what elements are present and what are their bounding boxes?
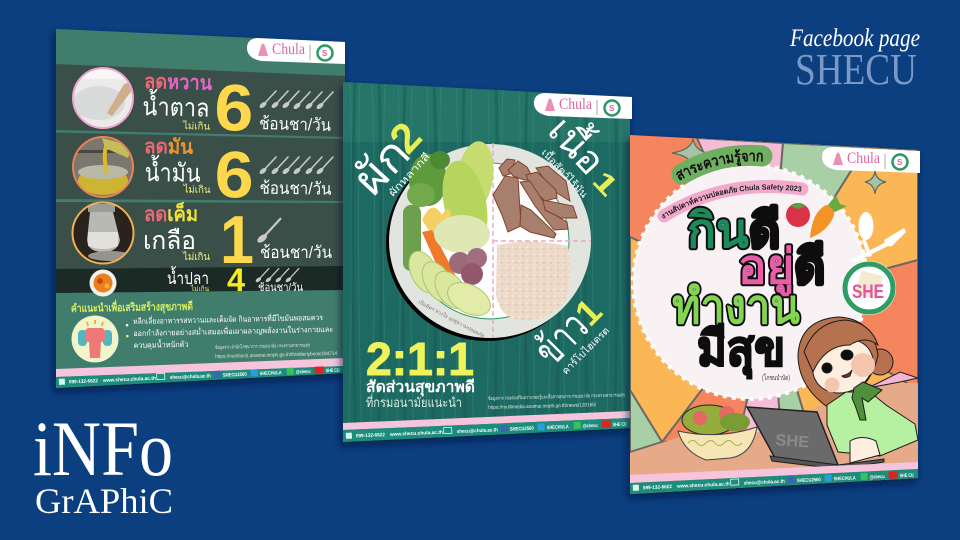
contact footer — [343, 418, 630, 442]
label: meat 1: 1 — [587, 165, 624, 202]
fish sauce row text: น้ำปลา — [167, 266, 209, 288]
meat — [493, 159, 577, 238]
source text — [488, 391, 625, 411]
pink footer strip — [56, 358, 345, 377]
dark content band — [56, 64, 345, 270]
contact footer: 099-132-6622 — [643, 484, 672, 491]
contact footer — [630, 469, 918, 494]
salt row text — [143, 201, 332, 278]
label: meat 1: เนื้อสัตว์ไร้มัน — [539, 145, 591, 201]
sugar photo — [74, 69, 132, 127]
decorative stars — [672, 139, 886, 194]
health advice bullets: ออกกำลังกายอย่างสม่ำเสมอเพื่อเผาผลาญพลังงานในร่างกายและ — [133, 324, 333, 338]
pink footer strip — [630, 462, 918, 483]
source text: https://multimedia.anamai.moph.go.th/news/120165/ — [488, 402, 597, 411]
nutrition therapy note: (โภชนบำบัด) — [762, 373, 790, 382]
salt photo ring — [72, 202, 134, 264]
heading: GRAPHIC: GrAPhiC — [35, 481, 173, 521]
oil photo ring — [73, 137, 133, 197]
panel: sodium sugar fat limits — [56, 29, 345, 388]
contact footer: SHECHULA — [834, 475, 856, 482]
source text: ข้อมูลจาก สำนักโภชนาการ กรมอนามัย กระทรวงสาธารณสุข — [215, 342, 310, 351]
contact footer: shecu@chula.ac.th — [170, 373, 211, 381]
she badge: SHE — [852, 282, 884, 303]
laptop: SHE — [775, 432, 810, 451]
row divider two — [56, 199, 345, 203]
oil spoons — [258, 157, 333, 175]
contact footer: SHE CU — [900, 473, 914, 479]
sunburst background — [630, 138, 918, 452]
salt row text: ลดเค็ม — [144, 201, 198, 226]
healthy ratio caption: ที่กรมอนามัยแนะนำ — [366, 394, 462, 410]
label: vegetables 2: ผัก — [342, 127, 420, 205]
oil row text: น้ำมัน — [145, 154, 201, 188]
salt row text: ไม่เกิน — [182, 251, 210, 263]
table — [630, 383, 918, 476]
plate — [386, 143, 591, 341]
oil row text: ไม่เกิน — [182, 184, 211, 196]
black fish sauce band — [56, 266, 345, 293]
sugar row text: ไม่เกิน — [182, 120, 210, 133]
sugar row text: ลดหวาน — [144, 71, 213, 95]
fish sauce row text: ไม่เกิน — [190, 284, 209, 293]
source text: https://nutrition2.anamai.moph.go.th/th/elderlybook/194714 — [215, 351, 337, 360]
vegetables — [403, 139, 498, 322]
health advice bullets: หลีกเลี่ยงอาหารรสหวานและเค็มจัด กินอาหารที่มีไขมันพอสมควร — [133, 312, 323, 326]
contact footer: @shecu — [870, 474, 885, 481]
sugar spoons — [258, 91, 333, 110]
contact footer: SHECHULA — [547, 424, 569, 431]
she badge — [842, 261, 896, 315]
salt row text: ช้อนชา/วัน — [260, 243, 332, 262]
contact footer: shecu@chula.ac.th — [457, 427, 498, 435]
healthy ratio caption — [366, 378, 475, 410]
contact footer: www.shecu.chula.ac.th — [389, 430, 443, 438]
contact footer: www.shecu.chula.ac.th — [676, 481, 730, 490]
label: rice 1: ข้าว — [525, 302, 597, 374]
title: live well: อยู่ดี — [738, 241, 825, 297]
health advice bullets — [126, 312, 334, 350]
logo header — [534, 93, 632, 119]
central circle — [633, 165, 867, 399]
fish sauce row text — [167, 262, 303, 298]
label: rice 1: 1 — [567, 291, 610, 334]
fish sauce row text: 4 — [227, 262, 245, 298]
source text — [215, 341, 337, 360]
salt row text: 1 — [220, 202, 254, 278]
wood grain — [343, 80, 630, 445]
title: happy: มีสุข — [697, 323, 785, 379]
contact footer: SHECU2560 — [797, 477, 821, 484]
contact footer: shecu@chula.ac.th — [744, 479, 785, 487]
laptop — [747, 407, 884, 469]
contact footer: SHECU2560 — [510, 426, 534, 433]
sugar photo ring — [73, 68, 133, 128]
contact footer: SHECU2560 — [223, 372, 247, 379]
oil row text — [143, 136, 333, 213]
oil row text: 6 — [214, 137, 254, 212]
sugar row text — [142, 68, 333, 147]
watermark: SHECU: SHECU — [795, 45, 917, 94]
fish sauce spoons — [255, 269, 299, 283]
pill: chula safety event: งานสัปดาห์ความปลอดภัย Chula Safety 2023 — [662, 184, 802, 218]
label: meat 1: เนื้อ — [539, 104, 618, 183]
sugar row text: น้ำตาล — [142, 88, 210, 123]
ratio 2:1:1: 2:1:1 — [366, 333, 474, 385]
plate: เป็นมิตร ห่วงใย มุ่งสู่ความปลอดภัย — [417, 298, 486, 340]
character: girl — [798, 317, 918, 463]
heading: Facebook page: Facebook page — [789, 25, 920, 52]
oil row text: ช้อนชา/วัน — [259, 179, 332, 199]
label: vegetables 2 — [342, 113, 433, 205]
pill: knowledge from: สาระความรู้จาก — [676, 149, 763, 180]
salad bowl — [678, 405, 757, 460]
sugar row text: ช้อนชา/วัน — [259, 114, 332, 135]
fish sauce row text: ช้อนชา/วัน — [258, 282, 303, 294]
salt spoon — [256, 219, 280, 244]
health advice bullets: ควบคุมน้ำหนักตัว — [133, 338, 189, 350]
label: vegetables 2: 2 — [380, 113, 431, 162]
contact footer: www.shecu.chula.ac.th — [102, 376, 156, 384]
title: work: ทำงาน — [672, 281, 800, 334]
pink footer strip — [343, 411, 630, 430]
contact footer: SHE CU — [613, 422, 627, 428]
contact footer: 099-132-6622 — [356, 432, 385, 439]
healthy ratio caption: สัดส่วนสุขภาพดี — [366, 378, 475, 397]
contact footer: 099-132-6622 — [69, 378, 98, 385]
oil row text: ลดมัน — [144, 136, 194, 159]
salt photo — [74, 204, 132, 262]
sugar row text: 6 — [214, 70, 254, 145]
icon: tomato — [786, 203, 810, 227]
source text: ข้อมูลจาก กองส่งเสริมความรอบรู้และสื่อสารสุขภาพ กรมอนามัย กระทรวงสาธารณสุข — [488, 391, 625, 402]
health advice heading: คำแนะนำเพื่อเสริมสร้างสุขภาพดี — [71, 298, 193, 316]
contact footer: SHECHULA — [260, 370, 282, 377]
label: vegetables 2: ผักหลากสี — [386, 151, 433, 199]
label: meat 1 — [539, 104, 624, 202]
row divider one — [56, 130, 345, 139]
salt row text: เกลือ — [143, 227, 196, 255]
icon: carrot — [810, 195, 847, 238]
icon: fist with dumbbell — [72, 316, 118, 362]
panel: healthy plate 2:1:1 — [342, 80, 632, 445]
contact footer: @shecu — [583, 423, 598, 430]
contact footer: @shecu — [296, 369, 311, 376]
label: rice 1: คาร์โบไฮเดรต — [559, 324, 612, 377]
heading: INFO: iNFo — [33, 405, 173, 492]
contact footer: SHE CU — [326, 368, 340, 374]
title: eat well: กินดี — [687, 205, 780, 258]
fish sauce photo — [90, 270, 116, 296]
contact footer — [56, 366, 345, 388]
logo header — [822, 147, 920, 173]
oil photo — [74, 138, 132, 196]
panel: eat well live well poster — [622, 135, 922, 502]
rice — [496, 242, 571, 320]
logo header — [247, 38, 345, 64]
icon: spoon and fork — [851, 212, 906, 263]
